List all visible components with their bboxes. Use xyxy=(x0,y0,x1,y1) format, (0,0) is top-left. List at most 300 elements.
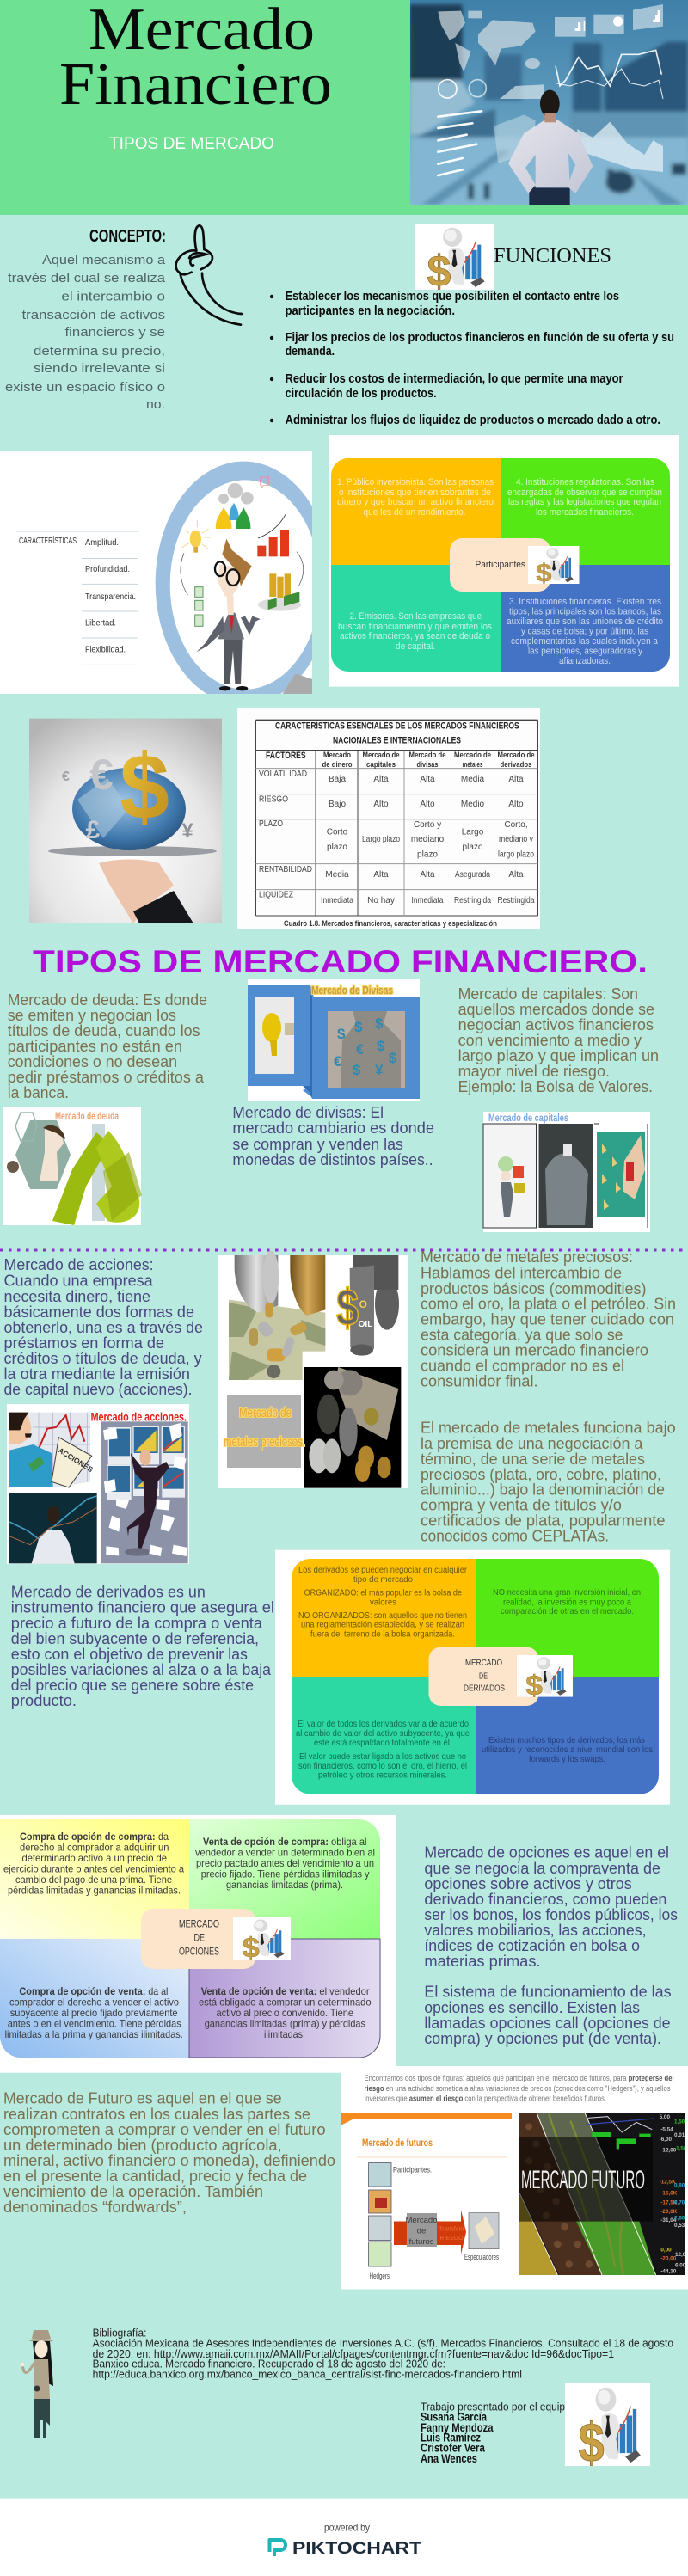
table: caracteristicas esenciales de los mercados: plazo xyxy=(417,849,438,860)
text: emisores xyxy=(338,611,492,652)
text: mercado de divisas: Mercado de divisas: El xyxy=(232,1104,384,1121)
table: caracteristicas esenciales de los mercados: RENTABILIDAD xyxy=(259,864,312,874)
text: mercado de derivados: Mercado de derivados es un xyxy=(11,1584,206,1601)
list: funciones xyxy=(270,289,674,427)
image: mercado futuro: -6,00 xyxy=(660,2137,673,2143)
table: caracteristicas esenciales de los mercados: plazo xyxy=(463,843,483,852)
image: mercado futuro: -20,00 xyxy=(660,2255,677,2261)
text: mercado de deuda xyxy=(8,991,207,1101)
text: mercado de deuda: la banca. xyxy=(8,1084,69,1101)
text: mercado de metales preciosos: término, de una serie de metales xyxy=(421,1451,645,1468)
text: mercado de metales preciosos: considera un mercado financiero xyxy=(421,1342,648,1359)
text: emisores: activos financieros, ya sean de deuda o xyxy=(340,631,490,641)
heading: funciones: FUNCIONES xyxy=(494,245,611,267)
text: trabajo presentado por el equipo: Fanny Mendoza xyxy=(421,2421,494,2434)
text: mercado de metales preciosos: aluminio...) bajo la denominación de xyxy=(421,1481,665,1499)
image: mercado futuro: 2,60 xyxy=(674,2216,685,2222)
text: mercado de metales preciosos: esta categoría, ya que solo se xyxy=(421,1327,623,1344)
text: mercado de divisas: se compran y venden las xyxy=(232,1136,403,1153)
text: derivados valor xyxy=(296,1720,470,1781)
table: caracteristicas esenciales de los mercados: Cuadro 1.8. Mercados financieros, características y especialización xyxy=(284,919,497,929)
diagram: mercado de futuros xyxy=(341,2113,512,2281)
image: mercado futuro: -31,04 xyxy=(660,2217,677,2223)
table: caracteristicas: Transparencia. xyxy=(85,592,136,602)
text: trabajo presentado por el equipo: Susana García xyxy=(421,2411,487,2424)
image: mercado futuro: -44,10 xyxy=(660,2268,677,2274)
image: mercado de deuda: Mercado de deuda xyxy=(55,1110,119,1122)
text: venta de opcion de venta: está obligado a comprar un determinado xyxy=(199,1996,372,2009)
table: caracteristicas esenciales de los mercados: Alta xyxy=(373,870,389,880)
icon: pointing hand xyxy=(176,225,242,325)
text: mercado de metales preciosos: El mercado de metales funciona bajo xyxy=(421,1420,676,1437)
photo: globe on tray: $ xyxy=(120,734,169,838)
table: caracteristicas esenciales de los mercados: Inmediata xyxy=(321,896,353,905)
text: mercado de opciones: índices de cotización en bolsa o xyxy=(424,1937,640,1954)
diagram: mercado de futuros: RIESGO xyxy=(439,2236,464,2242)
text: mercado de acciones: Mercado de acciones: xyxy=(3,1256,154,1273)
table: caracteristicas esenciales de los mercados: Mercado de xyxy=(363,751,399,760)
text: mercado de metales preciosos: consumidor final. xyxy=(421,1373,538,1390)
heading: tipos de mercado financiero: TIPOS DE MERCADO FINANCIERO. xyxy=(33,944,648,979)
text: mercado de futuro xyxy=(3,2089,335,2216)
image: mercado futuro: 5,00 xyxy=(660,2114,670,2120)
text: mercado de metales preciosos xyxy=(421,1248,676,1545)
table: caracteristicas esenciales de los mercados: Mercado de xyxy=(454,751,491,760)
table: caracteristicas esenciales de los mercados: plazo xyxy=(327,843,347,852)
text: mercado de derivados: precio a futuro de la compra o venta xyxy=(11,1615,263,1632)
table: caracteristicas esenciales de los mercados: PLAZO xyxy=(259,819,283,829)
text: mercado de futuro: mineral, activo financiero o moneda), definiendo xyxy=(3,2152,335,2169)
table: caracteristicas esenciales de los mercados: Mercado de xyxy=(409,751,445,760)
table: caracteristicas esenciales de los mercados: Asegurada xyxy=(455,870,490,880)
text: instituciones financieras: 3. Instituciones financieras. Existen tres xyxy=(509,597,661,607)
image: mercado de divisas xyxy=(248,979,420,1101)
table: caracteristicas esenciales de los mercados: Corto, xyxy=(504,820,528,830)
text: venta de opcion de compra: Venta de opción de compra: xyxy=(203,1836,329,1848)
icon: businessman (team) xyxy=(565,2383,650,2474)
center label: mercado de opciones: MERCADO xyxy=(179,1918,219,1930)
text: derivados negociar: Los derivados se pueden negociar en cualquier xyxy=(298,1566,468,1575)
image: mercado futuro: 0,53 xyxy=(674,2223,685,2229)
text: mercado de capitales: Mercado de capitales: Son xyxy=(458,985,638,1003)
center label: mercado de opciones: DE xyxy=(194,1932,205,1944)
text: derivados negociar xyxy=(298,1566,468,1639)
text: instituciones financieras: complementarias las cuales incluyen a xyxy=(511,636,659,647)
text: mercado de acciones: obtenerlo, una es a través de xyxy=(3,1319,203,1336)
text: mercado de capitales: Ejemplo: la Bolsa de Valores. xyxy=(458,1078,653,1095)
text: mercado de metales preciosos: Hablamos del intercambio de xyxy=(421,1265,622,1282)
text: mercado de derivados: esto con el objetivo de prevenir las xyxy=(11,1646,248,1663)
text: derivados valor: son financieros, como lo son el oro, el hierro, el xyxy=(298,1762,467,1771)
table: caracteristicas esenciales de los mercados: capitales xyxy=(366,760,396,770)
image: mercado de divisas: $ xyxy=(389,1050,397,1066)
text: mercado de acciones xyxy=(3,1256,203,1398)
text: mercado de deuda: condiciones o no desean xyxy=(8,1053,177,1070)
image: mercado futuro xyxy=(519,2113,687,2275)
image: mercado de deuda xyxy=(3,1107,142,1225)
panel: participantes diagram xyxy=(329,435,679,687)
text: compra de opcion de compra: pérdidas limitadas y ganancias ilimitadas. xyxy=(8,1885,181,1897)
panel: mercado de futuros xyxy=(341,2066,688,2289)
text: mercado de metales preciosos: como el oro, la plata o el petróleo. Sin xyxy=(421,1296,676,1313)
list: funciones: Reducir los costos de intermediación, lo que permite una mayor xyxy=(286,371,624,386)
text: publico inversionista: que les dé un rendimiento. xyxy=(363,507,466,518)
text: instituciones regulatorias xyxy=(507,477,662,518)
text: derivados inversion xyxy=(493,1588,641,1616)
text: instituciones regulatorias: 4. Instituciones regulatorias. Son las xyxy=(516,477,654,488)
text: mercado de acciones: necesita dinero, tiene xyxy=(3,1288,150,1305)
text: mercado de acciones: de capital nuevo (acciones). xyxy=(3,1381,193,1398)
image: mercado futuro: -1,50 xyxy=(674,2146,687,2152)
panel: caracteristicas image xyxy=(0,451,312,694)
illustration: cartoon businessman in blue ring xyxy=(155,461,312,694)
center label: participantes: $ xyxy=(536,559,551,587)
text: instituciones financieras: tipos, las principales son los bancos, las xyxy=(509,607,661,617)
table: caracteristicas esenciales de los mercados: CARACTERÍSTICAS ESENCIALES DE LOS MERCADOS FINANCIEROS xyxy=(275,720,519,731)
text: mercado de futuro: realizan contratos en los cuales las partes se xyxy=(3,2106,310,2123)
image: metales preciosos: Mercado de xyxy=(239,1406,292,1420)
text: instituciones regulatorias: encargadas de observar que se cumplan xyxy=(507,488,662,498)
text: derivados valor: El valor puede estar ligado a los activos que no xyxy=(299,1752,466,1762)
text: compra de opcion de venta: antes o en el vencimiento. Tiene pérdidas xyxy=(8,2018,181,2030)
table: caracteristicas esenciales de los mercados: divisas xyxy=(416,760,439,770)
text: mercado de acciones: créditos o títulos de deuda, y xyxy=(3,1350,202,1367)
text: concepto heading: CONCEPTO: xyxy=(89,227,166,246)
text: derivados valor: petróleo y otros recursos minerales. xyxy=(318,1771,447,1781)
image: mercado futuro: 12,0 xyxy=(675,2252,686,2258)
text: mercado de capitales: mayor nivel de riesgo. xyxy=(458,1063,610,1080)
center label: mercado de derivados: DERIVADOS xyxy=(464,1684,505,1694)
text: mercado de derivados: posibles variaciones al alza o a la baja xyxy=(11,1661,272,1678)
image: mercado futuro: -20,0K xyxy=(660,2209,678,2215)
diagram: mercado de futuros: Hedgers xyxy=(370,2272,390,2281)
text: mercado de derivados: del precio que se genere sobre éste xyxy=(11,1677,254,1694)
text: trabajo presentado por el equipo: Ana Wences xyxy=(421,2452,477,2465)
image: mercado de divisas: $ xyxy=(375,1015,384,1032)
center label: mercado de derivados: DE xyxy=(479,1672,488,1682)
text: figuras del mercado de futuros: Encontramos dos tipos de figuras: aquellos que participan en el mercado de futuros, para protegerse del xyxy=(365,2074,674,2083)
table: caracteristicas esenciales de los mercados: LIQUIDEZ xyxy=(259,889,293,899)
image: mercado futuro: 1,50 xyxy=(674,2119,685,2125)
photo: globe on tray: € xyxy=(89,751,114,799)
image: mercado de divisas: $ xyxy=(354,1019,363,1035)
table: caracteristicas esenciales de los mercados: Alta xyxy=(373,775,389,784)
text: mercado de opciones xyxy=(424,1844,678,2047)
text: mercado de metales preciosos: embargo, hay que tener cuidado con xyxy=(421,1311,674,1328)
text: compra de opcion de compra: ejercicio durante o antes del vencimiento a xyxy=(3,1863,184,1875)
text: emisores: de capital. xyxy=(396,641,435,652)
footer: powered by piktochart: PIKTOCHART xyxy=(292,2540,421,2558)
icon: businessman with dollar and bars: $ xyxy=(427,246,451,296)
text: concepto paragraph: existe un espacio físico o xyxy=(5,380,165,395)
text: derivados valor: al cambio de valor del activo subyacente, ya que xyxy=(296,1729,470,1739)
image: mercado futuro: -17,5K xyxy=(660,2199,678,2205)
text: derivados negociar: valores xyxy=(370,1598,396,1608)
panel: mercado de opciones diagram xyxy=(0,1815,396,2073)
text: mercado de metales preciosos: compra y venta de títulos y/o xyxy=(421,1497,622,1514)
text: venta de opcion de compra xyxy=(195,1836,375,1891)
list: funciones: demanda. xyxy=(286,344,335,359)
text: trabajo presentado por el equipo: Luis Ramírez xyxy=(421,2432,481,2444)
diagram: mercado de futuros: Especuladores xyxy=(464,2253,499,2262)
text: venta de opcion de venta: Venta de opción de venta: xyxy=(201,1985,316,1997)
text: mercado de opciones: derivado financieros, como pueden xyxy=(424,1891,667,1908)
image: mercado de divisas: $ xyxy=(353,1062,361,1078)
text: compra de opcion de venta: Compra de opción de venta: xyxy=(19,1985,145,1997)
text: venta de opcion de compra: obliga al xyxy=(331,1836,366,1848)
table: caracteristicas esenciales de los mercados: Baja xyxy=(329,775,346,784)
photo: globe on tray: £ xyxy=(86,816,101,844)
text: instituciones financieras xyxy=(507,597,663,666)
text: mercado de derivados: producto. xyxy=(11,1692,77,1709)
table: caracteristicas esenciales de los mercados: Alto xyxy=(373,800,389,809)
table: caracteristicas esenciales de los mercados: derivados xyxy=(501,760,531,770)
text: emisores: buscan financiamiento y que emiten los xyxy=(338,622,492,632)
table: caracteristicas esenciales de los mercados: Media xyxy=(325,870,349,880)
table: caracteristicas esenciales de los mercados: Mercado xyxy=(323,751,351,760)
text: mercado de opciones: llamadas opciones call (opciones de xyxy=(424,2015,671,2032)
table: caracteristicas esenciales de los mercados: Medio xyxy=(461,800,485,809)
text: bibliografia xyxy=(93,2327,673,2381)
photo: man looking at financial dashboard xyxy=(409,0,688,205)
table: caracteristicas esenciales de los mercados: Corto y xyxy=(414,820,441,830)
text: mercado de capitales: largo plazo y que implican un xyxy=(458,1047,659,1064)
table: caracteristicas esenciales de los mercados: Inmediata xyxy=(411,896,444,905)
text: instituciones financieras: las pensiones, aseguradoras y xyxy=(528,647,642,657)
text: derivados tipos: forwards y los swaps. xyxy=(529,1755,605,1764)
text: mercado de deuda: participantes no están en xyxy=(8,1038,182,1055)
text: compra de opcion de venta: subyacente al precio fijado previamente xyxy=(10,2007,178,2019)
text: mercado de futuro: comprometen a comprar o vender en el futuro xyxy=(3,2121,326,2138)
image: mercado de capitales: Mercado de capitales xyxy=(488,1112,568,1124)
text: derivados negociar: NO ORGANIZADOS: son aquellos que no tienen xyxy=(298,1611,467,1621)
image: mercado de capitales xyxy=(483,1112,650,1232)
image: mercado de acciones xyxy=(7,1404,189,1564)
text: bibliografia: http://educa.banxico.org.mx/banco_mexico_banca_central/sist-finc-mercados-financiero.html xyxy=(93,2368,522,2381)
text: concepto paragraph: no. xyxy=(146,397,165,412)
text: venta de opcion de compra: ganancias limitadas (prima). xyxy=(226,1879,343,1891)
table: caracteristicas esenciales de los mercados: RIESGO xyxy=(259,794,288,805)
text: mercado de derivados: del bien subyacente o de referencia, xyxy=(11,1630,259,1647)
text: compra de opcion de compra: determinado activo a un precio de xyxy=(22,1852,167,1864)
table: caracteristicas esenciales de los mercados: mediano y xyxy=(499,835,533,844)
image: mercado futuro: -12,00 xyxy=(660,2148,677,2154)
photo: globe on tray: € xyxy=(62,770,70,784)
diagram: mercado de futuros: Participantes. xyxy=(393,2165,432,2175)
text: venta de opcion de venta xyxy=(199,1985,372,2040)
center label: mercado de derivados: MERCADO xyxy=(465,1659,502,1668)
table: caracteristicas esenciales de los mercados: Largo xyxy=(462,828,484,837)
text: instituciones financieras: auxiliares que son las uniones de crédito xyxy=(507,616,663,627)
diagram: mercado de futuros: Transferir xyxy=(439,2227,465,2232)
text: mercado de futuro: un determinado bien (producto agrícola, xyxy=(3,2137,282,2154)
diagram: mercado de futuros: de xyxy=(417,2227,426,2236)
table: caracteristicas esenciales de los mercados: Alto xyxy=(508,800,524,809)
text: mercado de capitales: aquellos mercados donde se xyxy=(458,1001,654,1018)
text: derivados valor: El valor de todos los derivados varía de acuerdo xyxy=(298,1720,469,1729)
text: compra de opcion de compra: da xyxy=(158,1831,169,1843)
text: trabajo presentado por el equipo: Trabajo presentado por el equip xyxy=(421,2401,565,2413)
table: caracteristicas xyxy=(16,531,138,665)
image: mercado de divisas: $ xyxy=(337,1026,346,1042)
table: caracteristicas esenciales de los mercados: Mercado de xyxy=(497,751,535,760)
text: mercado de opciones: que se negocia la compraventa de xyxy=(424,1860,660,1877)
text: derivados tipos xyxy=(482,1736,653,1764)
image: metales preciosos xyxy=(218,1250,408,1488)
center label: mercado de derivados: $ xyxy=(525,1670,543,1702)
text: mercado de futuro: vencimiento de la operación. También xyxy=(3,2183,263,2200)
text: derivados tipos: utilizados y reconocidos a nivel mundial son los xyxy=(482,1745,653,1755)
text: derivados inversion: NO necesita una gran inversión inicial, en xyxy=(493,1588,641,1598)
photo: globe on tray xyxy=(29,719,222,923)
table: caracteristicas esenciales de los mercados: NACIONALES E INTERNACIONALES xyxy=(333,735,461,745)
image: mercado futuro: 0,70 xyxy=(674,2199,685,2205)
text: derivados negociar: fuera del terreno de la bolsa organizada. xyxy=(310,1629,455,1639)
table: caracteristicas esenciales de los mercados: Alta xyxy=(420,870,435,880)
text: mercado de opciones: El sistema de funcionamiento de las xyxy=(424,1984,672,2001)
text: mercado de capitales: con vencimiento a medio y xyxy=(458,1032,642,1049)
text: trabajo presentado por el equipo xyxy=(421,2401,565,2465)
image: mercado de divisas: Mercado de Divisas xyxy=(311,984,393,997)
text: derivados negociar: tipo de mercado xyxy=(353,1575,413,1585)
text: mercado de derivados xyxy=(11,1584,274,1709)
image: mercado de acciones: Mercado de acciones. xyxy=(91,1410,187,1424)
icon: businessman with dollar and bars xyxy=(415,224,494,296)
panel: mercado de derivados diagram xyxy=(275,1550,670,1805)
text: compra de opcion de venta xyxy=(5,1985,183,2040)
text: compra de opcion de compra xyxy=(3,1831,184,1897)
table: caracteristicas: Libertad. xyxy=(85,619,116,628)
list: funciones: Establecer los mecanismos que posibiliten el contacto entre los xyxy=(286,289,619,304)
list: funciones: participantes en la negociación. xyxy=(286,304,455,318)
text: mercado de deuda: pedir préstamos o créditos a xyxy=(8,1069,205,1086)
table: caracteristicas esenciales de los mercados: Largo plazo xyxy=(362,835,400,844)
text: compra de opcion de venta: comprador el derecho a vender el activo xyxy=(9,1996,179,2009)
text: compra de opcion de compra: derecho al comprador a adquirir un xyxy=(20,1842,169,1854)
image: mercado de divisas: $ xyxy=(377,1038,385,1054)
image: metales preciosos: metales preciosos. xyxy=(224,1435,305,1450)
table: caracteristicas esenciales de los mercados: metales xyxy=(463,760,483,770)
center label: mercado de opciones: OPCIONES xyxy=(179,1946,219,1958)
table: caracteristicas esenciales de los mercados: Alta xyxy=(508,775,524,784)
text: trabajo presentado por el equipo: Cristofer Vera xyxy=(421,2442,485,2455)
text: venta de opcion de venta: ilimitadas. xyxy=(264,2028,305,2040)
text: mercado de opciones: opciones sobre activos y otros xyxy=(424,1875,632,1892)
title: Financiero xyxy=(59,52,332,118)
text: mercado de metales preciosos: Mercado de metales preciosos: xyxy=(421,1248,633,1266)
text: venta de opcion de venta: activo al precio convenido. Tiene xyxy=(217,2007,353,2019)
text: mercado de deuda: Mercado de deuda: Es donde xyxy=(8,991,207,1009)
center label: participantes: Participantes xyxy=(475,560,525,570)
table: caracteristicas esenciales de los mercados: FACTORES xyxy=(266,751,306,761)
subtitle: TIPOS DE MERCADO xyxy=(109,135,274,153)
image: mercado de divisas: € xyxy=(334,1053,342,1070)
text: mercado de deuda: títulos de deuda, cuando los xyxy=(8,1022,200,1040)
text: bibliografia: de 2020, en: http://www.amaii.com.mx/AMAII/Portal/cfpages/contentmgr.cfm?fuente=nav&doc Id=96&docTipo=1 xyxy=(93,2347,614,2360)
center label: participantes xyxy=(450,538,580,592)
text: figuras del mercado de futuros: inversores que asumen el riesgo con la perspectiva de obtener beneficios futuros. xyxy=(365,2095,606,2103)
image: mercado de acciones: ACCIONES xyxy=(57,1446,95,1474)
text: venta de opcion de compra: precio fijado. Tiene pérdidas ilimitadas y xyxy=(201,1868,370,1880)
diagram: mercado de futuros: futuros xyxy=(408,2237,434,2247)
list: funciones: circulación de los productos. xyxy=(286,386,437,401)
text: bibliografia: Banxico educa. Mercado financiero. Recuperado el 18 de agosto del 2020 de: xyxy=(93,2358,445,2371)
table: caracteristicas esenciales de los mercados: VOLATILIDAD xyxy=(259,769,307,779)
footer: powered by piktochart xyxy=(0,2499,688,2576)
text: figuras del mercado de futuros xyxy=(365,2074,674,2103)
text: concepto paragraph: través del cual se realiza xyxy=(8,271,166,285)
table: caracteristicas esenciales de los mercados: Restringida xyxy=(454,896,491,905)
image: mercado de divisas: ¥ xyxy=(375,1062,384,1078)
text: mercado de divisas xyxy=(232,1104,434,1168)
text: mercado de metales preciosos: certificados de plata, popularmente xyxy=(421,1512,666,1530)
text: mercado de capitales xyxy=(458,985,659,1095)
table: caracteristicas: CARACTERÍSTICAS xyxy=(19,535,77,546)
text: venta de opcion de venta: el vendedor xyxy=(319,1985,370,1997)
table: caracteristicas: Amplitud. xyxy=(85,538,119,548)
text: mercado de divisas: mercado cambiario es donde xyxy=(232,1119,434,1137)
text: derivados tipos: Existen muchos tipos de derivados, los más xyxy=(488,1736,645,1745)
image: mercado futuro: 6,00 xyxy=(675,2263,686,2269)
text: mercado de futuro: en el presente la cantidad, precio y fecha de xyxy=(3,2168,307,2185)
text: mercado de opciones: opciones es sencillo. Existen las xyxy=(424,1999,640,2016)
text: mercado de opciones: ser los bonos, los fondos públicos, los xyxy=(424,1906,678,1923)
table: caracteristicas esenciales de los mercados: mediano xyxy=(411,835,445,844)
diagram: mercado de futuros: Mercado de futuros xyxy=(362,2137,433,2149)
text: mercado de opciones: valores mobiliarios, las acciones, xyxy=(424,1922,647,1939)
image: mercado futuro: 0,00 xyxy=(660,2247,672,2253)
text: concepto paragraph: financieros y se xyxy=(65,325,165,340)
text: mercado de capitales: negocian activos financieros xyxy=(458,1016,654,1033)
image: mercado futuro: -12,5K xyxy=(660,2179,676,2185)
table: caracteristicas: Flexibilidad. xyxy=(85,646,126,655)
text: mercado de acciones: Cuando una empresa xyxy=(3,1273,154,1290)
text: venta de opcion de compra: vendedor a vender un determinado bien al xyxy=(195,1847,375,1859)
image: mercado futuro: -15,0K xyxy=(660,2191,678,2197)
text: bibliografia: Bibliografía: xyxy=(93,2327,146,2340)
text: compra de opcion de venta: limitadas a la prima y ganancias ilimitadas. xyxy=(5,2028,183,2040)
footer: powered by piktochart: powered by xyxy=(324,2521,370,2533)
text: mercado de acciones: préstamos en forma de xyxy=(3,1334,164,1352)
text: derivados inversion: comparación de otras en el mercado. xyxy=(501,1607,634,1616)
text: concepto paragraph: determina su precio, xyxy=(34,344,165,359)
text: mercado de acciones: básicamente dos formas de xyxy=(3,1303,194,1321)
table: caracteristicas esenciales de los mercados: de dinero xyxy=(322,760,353,770)
text: concepto paragraph: el intercambio o xyxy=(61,289,165,304)
table: caracteristicas esenciales de los mercados: largo plazo xyxy=(498,849,534,860)
text: mercado de metales preciosos: productos básicos (commodities) xyxy=(421,1280,647,1297)
image: metales preciosos: OIL xyxy=(359,1320,372,1329)
image: mercado de divisas: € xyxy=(356,1041,365,1058)
illustration: woman with hat xyxy=(21,2330,53,2438)
text: venta de opcion de compra: precio pactado antes del vencimiento a un xyxy=(196,1857,374,1869)
text: mercado de derivados: instrumento financiero que asegura el xyxy=(11,1599,274,1616)
text: mercado de divisas: monedas de distintos países.. xyxy=(232,1151,433,1168)
text: instituciones regulatorias: las reglas y las legislaciones que regulan xyxy=(508,497,661,507)
text: derivados valor: este está respaldado totalmente en él. xyxy=(314,1739,452,1748)
text: mercado de opciones: compra) y opciones put (de venta). xyxy=(424,2030,661,2047)
text: mercado de metales preciosos: la premisa de una negociación a xyxy=(421,1435,643,1452)
panel: header band xyxy=(0,0,688,215)
text: derivados inversion: realidad, la inversión es muy poco a xyxy=(503,1598,631,1608)
text: mercado de futuro: Mercado de Futuro es aquel en el que se xyxy=(3,2089,282,2107)
photo: globe on tray: ¥ xyxy=(181,819,194,843)
center label: mercado de derivados xyxy=(428,1647,573,1706)
table: caracteristicas esenciales de los mercados xyxy=(237,708,540,929)
table: caracteristicas esenciales de los mercados: Restringida xyxy=(497,896,535,905)
text: mercado de acciones: la otra mediante la emisión xyxy=(3,1365,190,1383)
text: publico inversionista: o instituciones que tienen sobrantes de xyxy=(339,488,491,498)
